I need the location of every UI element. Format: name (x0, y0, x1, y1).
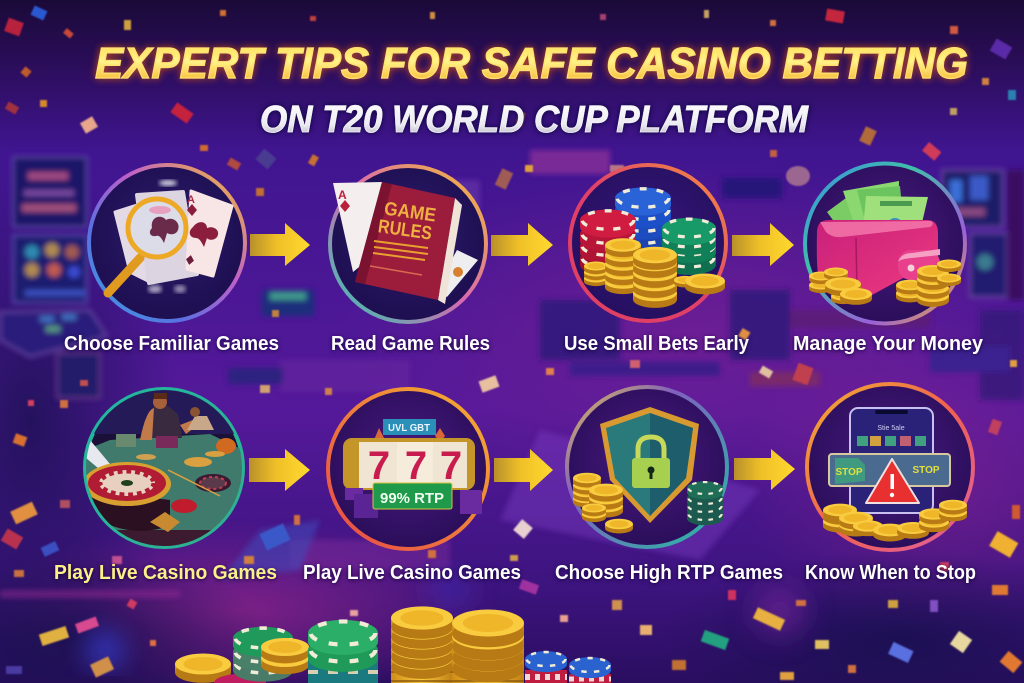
arrow 2 (491, 223, 553, 266)
orange coins (261, 638, 309, 674)
step 6: high RTP slot machine (328, 389, 488, 549)
red and blue chips (525, 651, 611, 683)
label: play live casino games (yellow): Play Live Casino Games (54, 562, 277, 584)
pink chip (214, 674, 266, 683)
icon: slot machine: 7 (405, 444, 427, 488)
icon: cards and magnifier: A (187, 194, 195, 206)
icon: slot machine: 7 (368, 444, 390, 488)
step 7: choose high RTP games (567, 387, 727, 547)
icon: shield with padlock (573, 407, 723, 533)
ring and disc (330, 166, 486, 322)
label: use small bets early: Use Small Bets Early (564, 333, 750, 355)
ring and disc (807, 384, 973, 550)
icon: chips and coins (580, 188, 725, 308)
icon: slot machine: 99% RTP (380, 490, 444, 507)
arrow 5 (494, 449, 553, 491)
gold coin stack 2 (452, 610, 524, 683)
icon: phone with stop warning: STOP (912, 465, 940, 476)
ring and disc (89, 165, 245, 321)
icon: rule book: GAME (383, 198, 437, 227)
icon: phone with stop warning: STOP (835, 467, 863, 478)
step 1: choose familiar games (89, 165, 245, 321)
step 5: play live casino games (83, 389, 243, 550)
heading line 1: EXPERT TIPS FOR SAFE CASINO BETTING (95, 39, 968, 88)
icon: rule book: A (338, 188, 347, 202)
icon: phone with stop warning (823, 408, 967, 541)
arrow 4 (249, 449, 310, 491)
icon: slot machine: UVL GBT (388, 423, 430, 434)
label: play live casino games (white): Play Live Casino Games (303, 562, 521, 584)
ring and disc (805, 164, 965, 324)
icon: phone with stop warning: Stie 5ale (877, 425, 905, 432)
ring and disc (567, 387, 727, 547)
green chips left (233, 627, 293, 682)
label: know when to stop: Know When to Stop (805, 562, 976, 584)
step 8: know when to stop (807, 384, 973, 550)
icon: slot machine (343, 419, 482, 518)
bottom pile of chips and coins (175, 606, 611, 683)
icon: slot machine: 7 (440, 444, 462, 488)
icon: rule book: RULES (377, 216, 433, 245)
ring and disc (570, 165, 726, 321)
step 2: read game rules (330, 166, 486, 322)
gold coin stack 1 (391, 606, 453, 683)
ring and disc (328, 389, 488, 549)
label: read game rules: Read Game Rules (331, 333, 490, 355)
icon: live casino table (83, 389, 243, 550)
icon: cards and magnifier (108, 180, 232, 293)
step 4: manage your money (805, 164, 965, 324)
background: blurred casino machines (0, 150, 1024, 598)
label: choose familiar games: Choose Familiar Games (64, 333, 279, 355)
arrow 1 (250, 223, 310, 266)
arrow 6 (734, 449, 795, 490)
orange coin (175, 654, 231, 683)
green chips right (308, 620, 378, 683)
icon: rule book (333, 182, 478, 304)
title (95, 39, 968, 141)
icon: wallet with cash (809, 181, 961, 307)
label: manage your money: Manage Your Money (793, 333, 984, 355)
ring and disc (85, 389, 243, 547)
step 3: use small bets early (570, 165, 726, 321)
arrow 3 (732, 223, 794, 266)
heading line 2: ON T20 WORLD CUP PLATFORM (260, 99, 809, 141)
background: blue glow spots (89, 570, 806, 666)
label: choose high RTP games: Choose High RTP Games (555, 562, 783, 584)
